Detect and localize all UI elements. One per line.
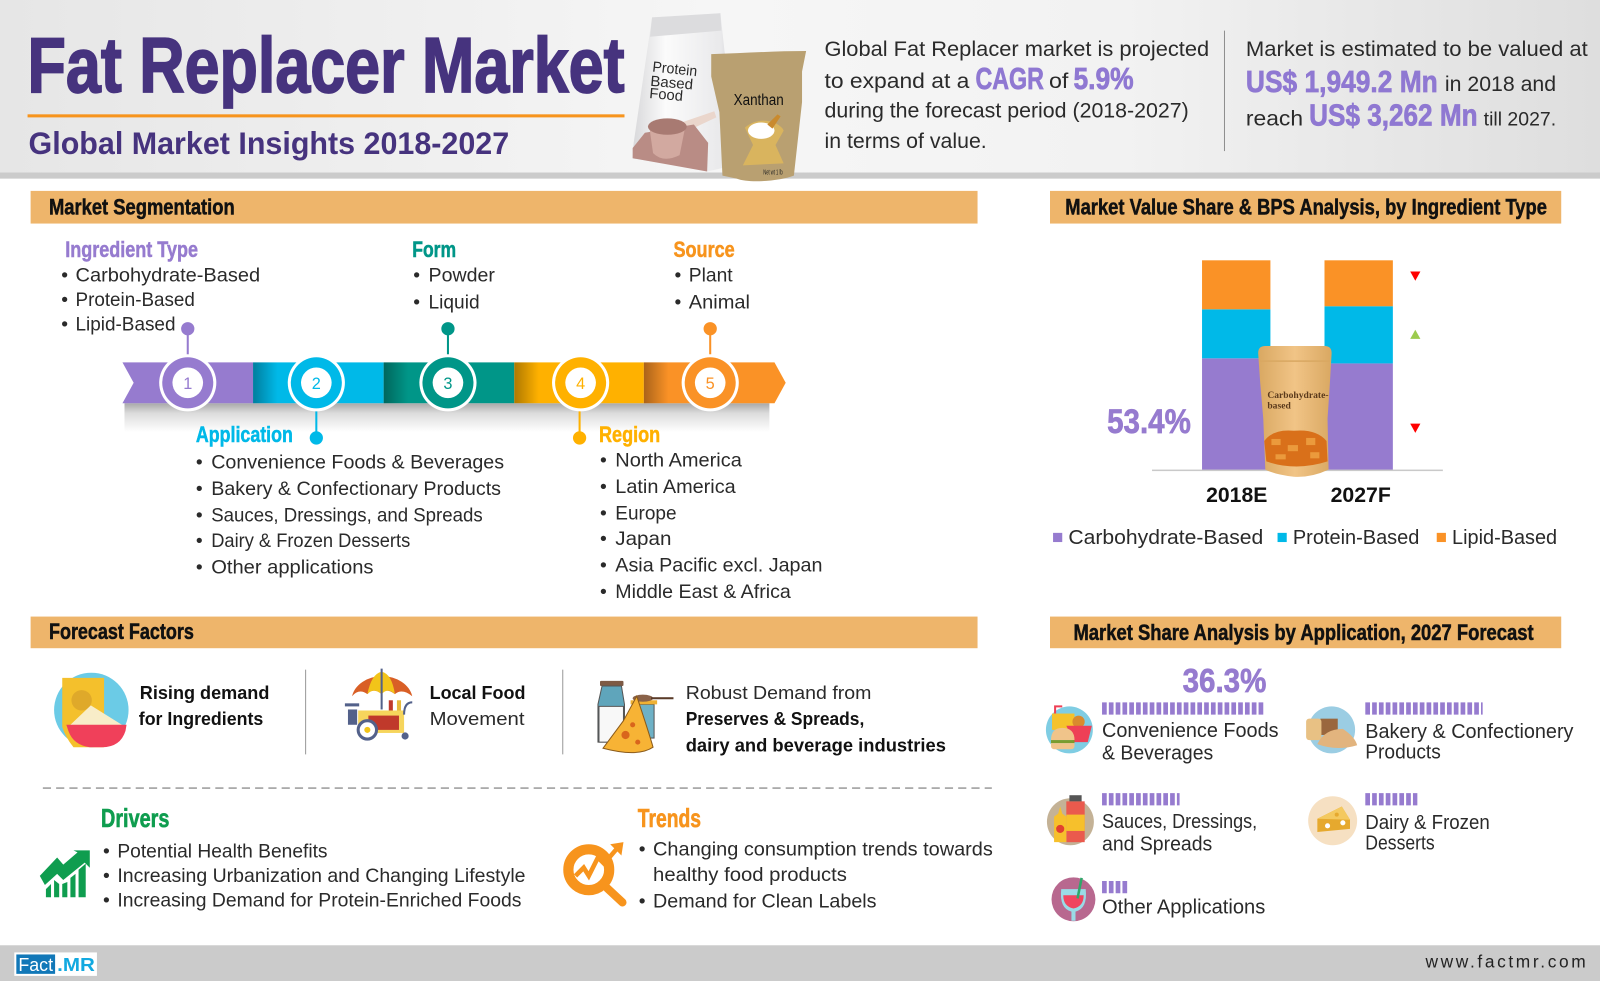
segment: application: •	[196, 452, 203, 474]
intro text: CAGR: 5.9%	[1073, 62, 1134, 96]
product image: carbohydrate pouch: based	[1267, 400, 1291, 411]
drivers	[101, 805, 526, 911]
text: robust demand	[686, 683, 946, 756]
text: rising demand	[139, 683, 269, 730]
stacked bar chart: 53.4%	[1107, 403, 1191, 441]
timeline ribbon	[122, 322, 786, 445]
logo: Fact	[18, 954, 53, 975]
stacked bar chart	[1107, 260, 1443, 507]
segment: ingredient type: •	[61, 314, 68, 336]
intro text: market value	[1246, 37, 1588, 133]
segment: form: •	[413, 265, 420, 287]
dashed separator	[43, 787, 992, 789]
product image: xanthan bag: Xanthan	[734, 92, 784, 109]
intro text: market value: reach	[1246, 107, 1303, 131]
segment: application: Dairy & Frozen Desserts	[211, 530, 410, 552]
chart legend: Lipid-Based	[1452, 527, 1557, 549]
trends: healthy food products	[653, 864, 847, 886]
product image: carbohydrate pouch: Carbohydrate-	[1267, 390, 1329, 401]
stacked bar chart: 2027F	[1331, 483, 1391, 507]
divider	[305, 670, 306, 754]
segment: ingredient type: •	[61, 289, 68, 311]
trends: Demand for Clean Labels	[653, 890, 877, 913]
segment: application: •	[196, 557, 203, 579]
application share: dairy: Desserts	[1365, 832, 1435, 854]
segment: source: •	[674, 265, 681, 287]
segment: form: •	[413, 291, 420, 313]
trends: •	[639, 890, 646, 913]
product image: protein bag: Food	[649, 86, 684, 105]
segment: region: •	[600, 555, 607, 577]
segment: ingredient type: Protein-Based	[76, 289, 195, 311]
product image: protein bag	[633, 13, 743, 171]
icon: food cart	[345, 669, 412, 740]
segment: source: Animal	[689, 291, 750, 313]
product image: carbohydrate pouch	[1258, 346, 1332, 477]
segment: source: Source	[673, 237, 735, 262]
timeline ribbon: 5	[706, 375, 715, 393]
segment: region: •	[600, 450, 607, 472]
segment: application: •	[196, 478, 203, 500]
trends	[638, 805, 993, 913]
segment: region: •	[600, 528, 607, 550]
segment: form: Form	[412, 237, 456, 262]
segment: ingredient type: Carbohydrate-Based	[76, 265, 260, 287]
segment: application: •	[196, 530, 203, 552]
intro text: CAGR: to expand at a	[824, 69, 969, 93]
drivers: •	[103, 840, 110, 862]
application share: other: Other Applications	[1102, 897, 1265, 919]
intro text: CAGR	[824, 37, 1209, 153]
application share: convenience foods	[1046, 663, 1279, 764]
product image: protein bag: Protein	[652, 60, 698, 80]
chart legend: Protein-Based	[1293, 527, 1419, 549]
trends: Trends	[638, 805, 701, 833]
segment: source	[673, 237, 750, 313]
segment: region: •	[600, 581, 607, 603]
application share: convenience foods: Convenience Foods	[1102, 720, 1279, 742]
segment: ingredient type: Lipid-Based	[76, 314, 176, 336]
segment: region: Europe	[615, 503, 677, 525]
product image: xanthan bag	[711, 51, 806, 181]
intro text: CAGR: Global Fat Replacer market is projected	[824, 37, 1209, 61]
application share: sauces	[1047, 795, 1257, 855]
application share: convenience foods: 36.3%	[1183, 663, 1266, 700]
divider	[562, 670, 563, 754]
intro text: CAGR: during the forecast period (2018-2027)	[824, 98, 1189, 122]
segment: application: Application	[196, 422, 293, 447]
header divider	[1224, 31, 1225, 151]
product image: xanthan bag: Net wt 1 lb	[763, 169, 783, 177]
application share: other	[1052, 877, 1265, 921]
subtitle: Global Market Insights 2018-2027	[29, 125, 509, 161]
application share: bakery: Bakery & Confectionery	[1365, 721, 1574, 743]
text: local food: Local Food	[430, 683, 526, 704]
chart legend	[1053, 527, 1557, 549]
segment: region: Region	[599, 422, 660, 447]
segment: source: Plant	[689, 265, 733, 287]
intro text: market value: till 2027.	[1484, 109, 1556, 131]
text: local food	[430, 683, 526, 730]
logo	[14, 952, 97, 976]
product image: protein bag: Based	[650, 74, 694, 93]
segment: region: Japan	[615, 528, 671, 550]
segment: region: •	[600, 476, 607, 498]
footer bar	[0, 945, 1600, 981]
segment: region: Latin America	[615, 476, 736, 498]
application share: sauces: Sauces, Dressings,	[1102, 811, 1257, 833]
stacked bar chart: 2018E	[1206, 483, 1267, 507]
segment: ingredient type: Ingredient Type	[65, 237, 198, 262]
segment: region: North America	[615, 450, 742, 472]
segment: application	[196, 422, 504, 579]
trends: Changing consumption trends towards	[653, 838, 993, 860]
intro text: CAGR: in terms of value.	[824, 129, 987, 153]
text: local food: Movement	[430, 709, 525, 730]
drivers: Increasing Demand for Protein-Enriched Foods	[117, 889, 521, 911]
segment: form: Liquid	[429, 291, 480, 313]
intro text: market value: US$ 1,949.2 Mn	[1246, 65, 1438, 99]
application share: sauces: and Spreads	[1102, 833, 1212, 855]
text: robust demand: Robust Demand from	[686, 683, 871, 704]
segment: application: Convenience Foods & Beverages	[211, 452, 504, 474]
icon: trends magnifier	[568, 842, 623, 902]
application share: convenience foods: & Beverages	[1102, 742, 1213, 764]
application share: dairy: Dairy & Frozen	[1365, 812, 1490, 834]
text: rising demand: Rising demand	[140, 683, 269, 704]
segment: ingredient type: •	[61, 265, 68, 287]
icon: dairy and preserves	[598, 681, 673, 753]
title: Fat Replacer Market	[28, 23, 624, 109]
timeline ribbon: 3	[443, 375, 452, 393]
application share: dairy	[1308, 796, 1490, 854]
segment: form	[412, 237, 495, 313]
intro text: market value: Market is estimated to be valued at	[1246, 37, 1588, 61]
text: robust demand: Preserves & Spreads,	[686, 709, 864, 730]
text: rising demand: for Ingredients	[139, 709, 263, 730]
heading: market segmentation	[31, 191, 978, 224]
heading: market segmentation: Market Segmentation	[49, 194, 235, 219]
drivers: Potential Health Benefits	[117, 840, 328, 862]
intro text: market value: US$ 3,262 Mn	[1309, 99, 1478, 133]
segment: region: Middle East & Africa	[615, 581, 791, 603]
drivers: Drivers	[101, 805, 169, 833]
segment: ingredient type	[61, 237, 260, 336]
timeline ribbon: 4	[576, 375, 585, 393]
timeline ribbon: 1	[183, 375, 192, 393]
text: robust demand: dairy and beverage industries	[686, 735, 946, 756]
segment: form: Powder	[429, 265, 495, 287]
intro text: market value: in 2018 and	[1445, 72, 1556, 96]
heading: forecast factors	[31, 617, 978, 648]
drivers: Increasing Urbanization and Changing Lifestyle	[117, 865, 526, 887]
application share: bakery: Products	[1365, 741, 1441, 763]
segment: application: Sauces, Dressings, and Spreads	[211, 505, 483, 527]
icon: growth chart	[40, 850, 90, 897]
application share: bakery	[1306, 706, 1574, 763]
heading: forecast factors: Forecast Factors	[49, 619, 194, 644]
trends: •	[639, 838, 646, 860]
title underline	[28, 114, 624, 117]
intro text: CAGR: CAGR	[976, 62, 1044, 96]
header banner	[0, 0, 1600, 179]
segment: region	[599, 422, 822, 603]
drivers: •	[103, 889, 110, 911]
timeline ribbon: 2	[312, 375, 321, 393]
segment: application: Other applications	[211, 557, 373, 579]
chart legend: Carbohydrate-Based	[1068, 527, 1263, 549]
segment: region: •	[600, 503, 607, 525]
icon: ingredients	[54, 673, 129, 747]
segment: region: Asia Pacific excl. Japan	[615, 555, 822, 577]
segment: source: •	[674, 291, 681, 313]
drivers: •	[103, 865, 110, 887]
segment: application: •	[196, 505, 203, 527]
segment: application: Bakery & Confectionary Products	[211, 478, 501, 500]
website: www.factmr.com	[1425, 952, 1586, 972]
intro text: CAGR: of	[1049, 69, 1068, 93]
logo: .MR	[57, 954, 95, 975]
